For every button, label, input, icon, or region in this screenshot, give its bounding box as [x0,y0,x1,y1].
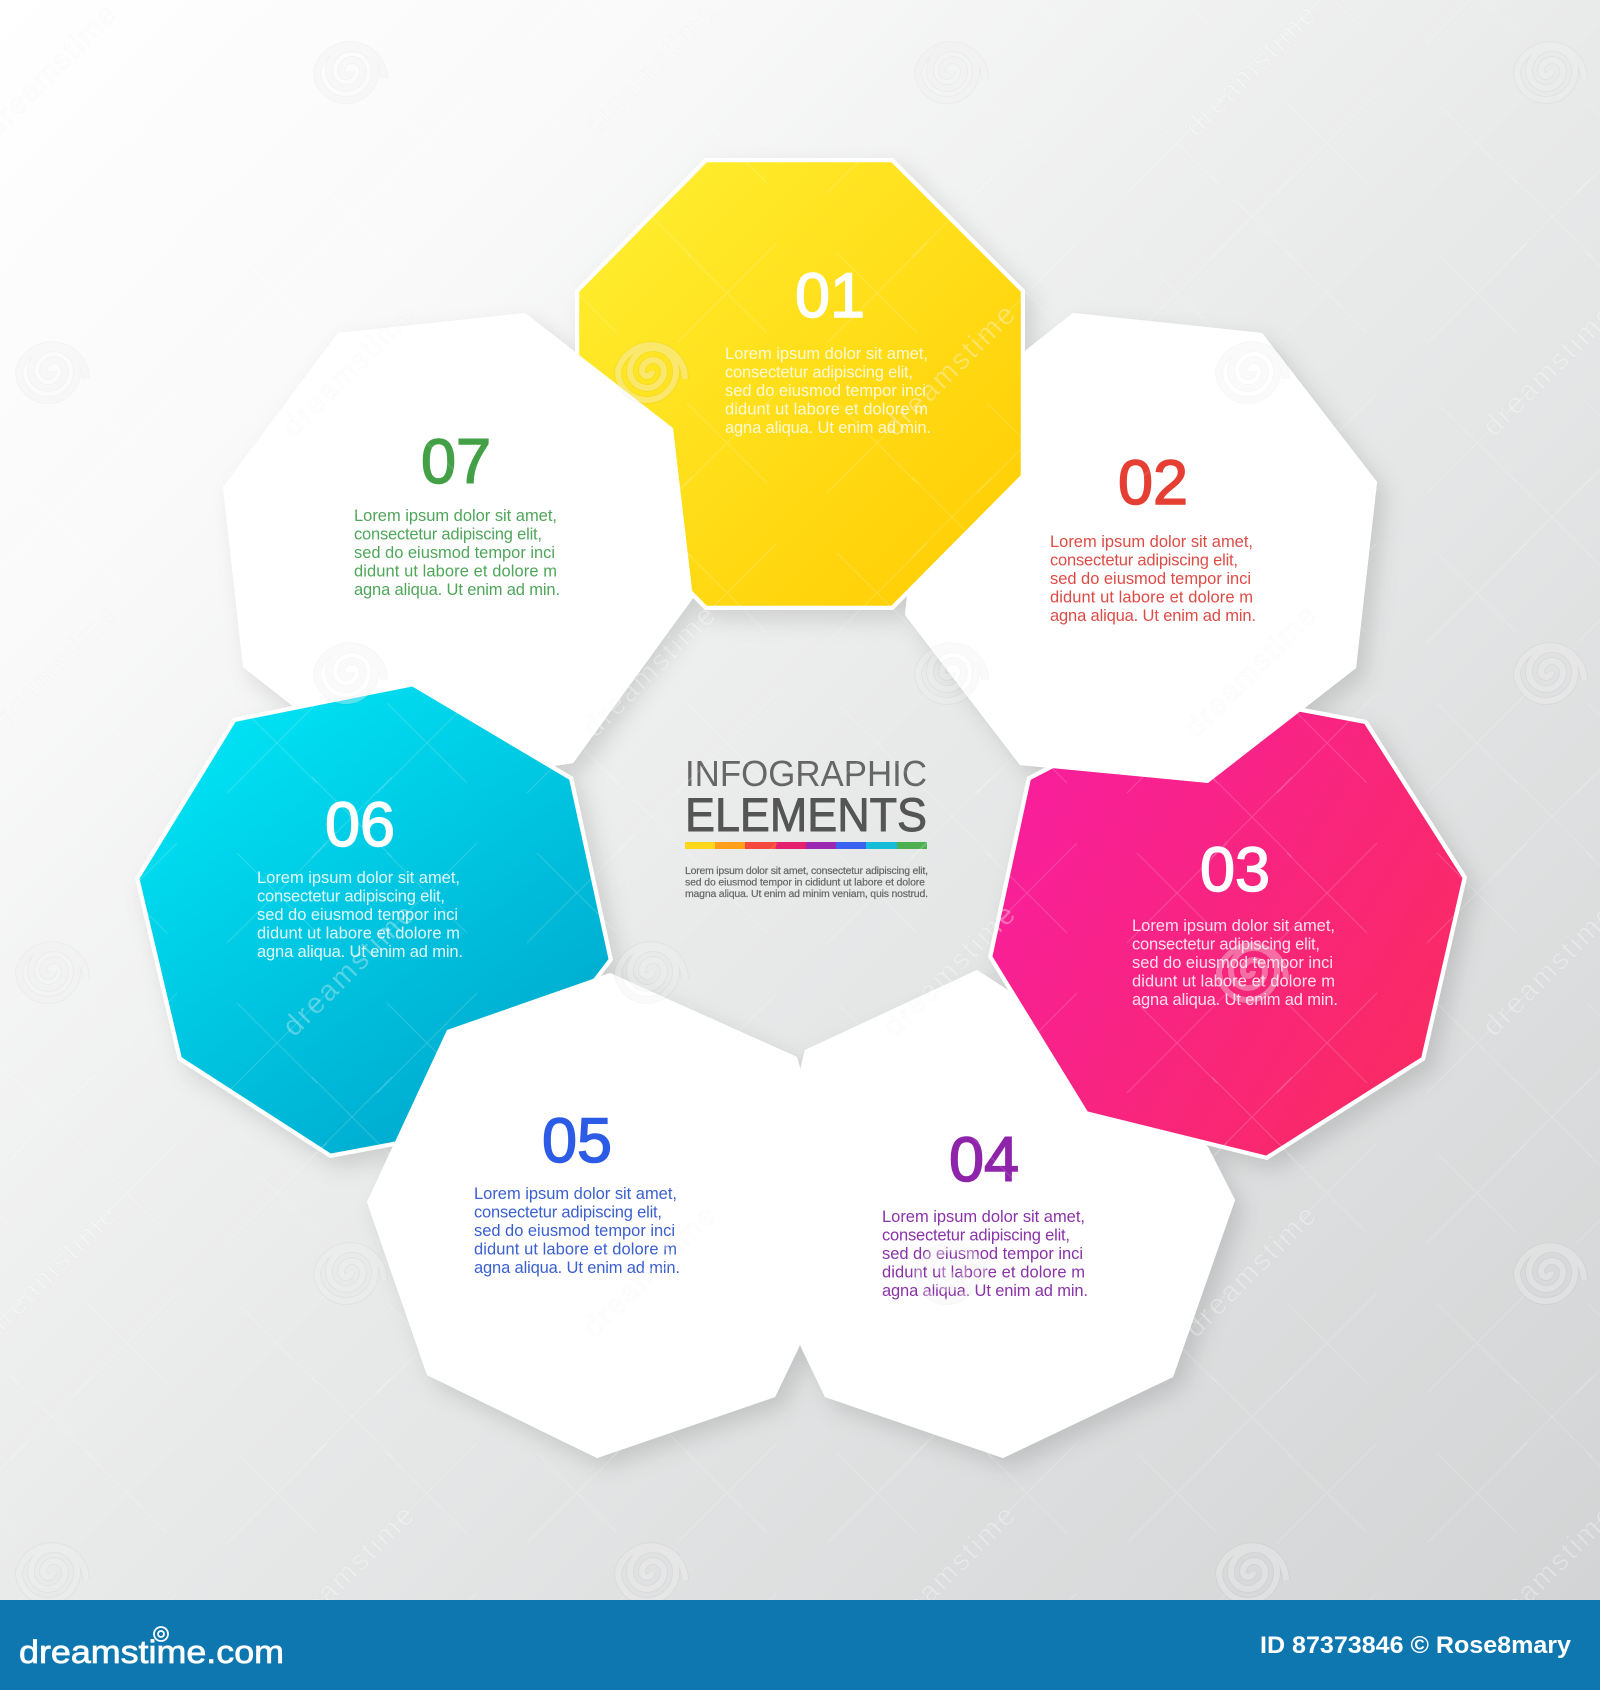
panel 01 text: didunt ut labore et dolore m [725,400,928,418]
heading: elements: ELEMENTS [685,788,927,841]
number 05: 05 [542,1106,612,1176]
panel 05 [367,973,800,1458]
panel 07 text: sed do eiusmod tempor inci [354,544,555,562]
panel 05 text: Lorem ipsum dolor sit amet, [474,1185,677,1203]
watermark overlay: dreamstime [878,299,1022,443]
panel 07 shape [223,313,693,790]
panel 05 text [474,1185,680,1277]
footer logo text: dreamstime.com [19,1634,284,1670]
panel 04 text: sed do eiusmod tempor inci [882,1245,1083,1263]
number 06: 06 [325,790,395,860]
panel 07 text [354,507,560,599]
panel 02 text [1050,533,1256,625]
panel 06 text: didunt ut labore et dolore m [257,924,460,942]
panel 03 text [1132,917,1338,1009]
watermark overlay: dreamstime [1179,0,1323,143]
watermark overlay: dreamstime [1179,1200,1323,1344]
panel 03 text: didunt ut labore et dolore m [1132,972,1335,990]
panel 03 text: consectetur adipiscing elit, [1132,936,1320,954]
panel 01 text: consectetur adipiscing elit, [725,364,913,382]
watermark overlay: dreamstime [578,0,722,143]
panel 05 shape [367,973,800,1458]
panel 01 text [725,345,931,437]
panel 04 text: consectetur adipiscing elit, [882,1226,1070,1244]
panel 07 text: didunt ut labore et dolore m [354,562,557,580]
watermark overlay: dreamstime [277,899,421,1043]
panel 03 text: Lorem ipsum dolor sit amet, [1132,917,1335,935]
panel 06 text: agna aliqua. Ut enim ad min. [257,943,463,961]
panel 06 text: Lorem ipsum dolor sit amet, [257,869,460,887]
watermark overlay: dreamstime [578,600,722,744]
panel 06 [137,684,611,1156]
panel 05 text: sed do eiusmod tempor inci [474,1222,675,1240]
watermark overlay: dreamstime [277,299,421,443]
number 07: 07 [421,427,491,497]
panel 05 text: didunt ut labore et dolore m [474,1240,677,1258]
panel 02 text: agna aliqua. Ut enim ad min. [1050,607,1256,625]
panel 04 text: didunt ut labore et dolore m [882,1264,1085,1282]
number 04: 04 [949,1125,1019,1195]
number 01: 01 [795,261,865,331]
panel 06 text [257,869,463,961]
watermark overlay: dreamstime [878,899,1022,1043]
panel 01 text: agna aliqua. Ut enim ad min. [725,419,931,437]
panel 01 text: Lorem ipsum dolor sit amet, [725,345,928,363]
panel 01 text: sed do eiusmod tempor inci [725,382,926,400]
panel 06 shape [137,684,611,1156]
watermark overlay: dreamstime [578,1200,722,1344]
heading: infographic: INFOGRAPHIC [685,753,927,794]
panel 03 shape [990,690,1465,1158]
center description text: sed do eiusmod tempor in cididunt ut labore et dolore [685,876,925,888]
panel 03 text: sed do eiusmod tempor inci [1132,954,1333,972]
panel 01 shape [577,160,1023,608]
footer bar [0,1600,1600,1690]
panel 02 text: consectetur adipiscing elit, [1050,552,1238,570]
panel 03 [990,690,1465,1158]
panel 06 text: sed do eiusmod tempor inci [257,906,458,924]
panel 05 text: consectetur adipiscing elit, [474,1204,662,1222]
panel 02 shape [905,313,1377,783]
watermark overlay: dreamstime [878,1500,1022,1644]
panel 07 text: Lorem ipsum dolor sit amet, [354,507,557,525]
panel 06 text: consectetur adipiscing elit, [257,888,445,906]
panel 02 text: didunt ut labore et dolore m [1050,588,1253,606]
center description text: magna aliqua. Ut enim ad minim veniam, quis nostrud. [685,888,928,900]
number 03: 03 [1200,835,1270,905]
panel 04 text [882,1208,1088,1300]
panel 01 [577,160,1023,608]
center description text: Lorem ipsum dolor sit amet, consectetur adipiscing elit, [685,865,928,877]
center title block [685,753,928,900]
panel 02 text: Lorem ipsum dolor sit amet, [1050,533,1253,551]
icon: footer logo spiral [154,1627,168,1641]
watermark overlay: dreamstime [277,1500,421,1644]
rainbow bar [685,842,927,849]
panel 05 text: agna aliqua. Ut enim ad min. [474,1259,680,1277]
panel 03 text: agna aliqua. Ut enim ad min. [1132,991,1338,1009]
panel 07 text: agna aliqua. Ut enim ad min. [354,581,560,599]
panel 04 shape [800,970,1235,1458]
number 02: 02 [1118,448,1188,518]
panel 02 text: sed do eiusmod tempor inci [1050,570,1251,588]
panel 02 [905,313,1377,783]
panel 07 text: consectetur adipiscing elit, [354,526,542,544]
watermark overlay: dreamstime [1179,600,1323,744]
footer credit: ID 87373846 © Rose8mary [1260,1632,1572,1659]
panel 04 text: Lorem ipsum dolor sit amet, [882,1208,1085,1226]
panel 07 [223,313,693,790]
center description text [685,865,928,900]
panel 04 text: agna aliqua. Ut enim ad min. [882,1282,1088,1300]
panel 04 [800,970,1235,1458]
